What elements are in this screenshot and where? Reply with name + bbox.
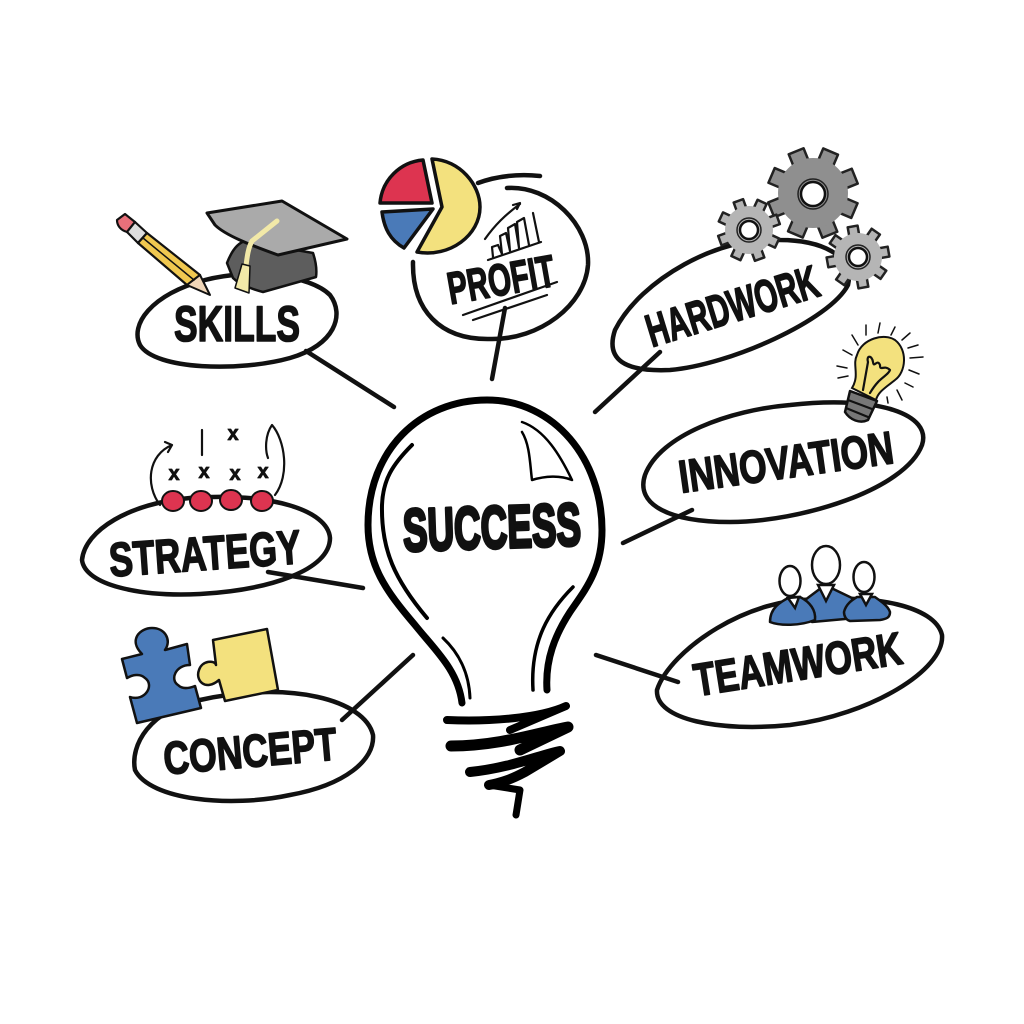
bubble: Teamwork [596, 599, 942, 727]
icon: puzzle pieces [122, 628, 278, 723]
icon: strategy plan: x [229, 463, 241, 485]
icon: strategy plan [151, 423, 284, 511]
bubble: Innovation [623, 402, 923, 543]
icon: pie chart [380, 159, 480, 253]
icon: gears [718, 148, 889, 288]
bubble: Hardwork [595, 240, 849, 412]
text: Concept: CONCEPT [161, 718, 339, 784]
icon: strategy plan: x [168, 463, 180, 485]
bubble: Strategy [82, 497, 363, 594]
icon: strategy plan: x [227, 423, 239, 445]
bubble: Profit [413, 175, 588, 379]
bubble: Skills [138, 274, 394, 407]
icon: idea bulb [837, 323, 923, 422]
icon: pencil [117, 214, 210, 295]
icon: graduation cap [207, 201, 347, 293]
text: Innovation: INNOVATION [675, 421, 897, 503]
gear: left [718, 199, 780, 261]
text: Skills: SKILLS [174, 296, 300, 352]
icon: strategy plan: x [257, 461, 269, 483]
text: Teamwork: TEAMWORK [690, 622, 906, 706]
text: Hardwork: HARDWORK [640, 255, 825, 357]
icon: strategy plan: x [198, 461, 210, 483]
gear: large [768, 148, 858, 238]
icon: team people [770, 546, 890, 625]
text: Strategy: STRATEGY [107, 521, 303, 588]
bubble: Concept [134, 655, 413, 801]
text: Profit: PROFIT [443, 245, 559, 314]
gear: right [827, 226, 889, 288]
central light bulb [368, 400, 602, 815]
label: Success: SUCCESS [402, 491, 582, 564]
